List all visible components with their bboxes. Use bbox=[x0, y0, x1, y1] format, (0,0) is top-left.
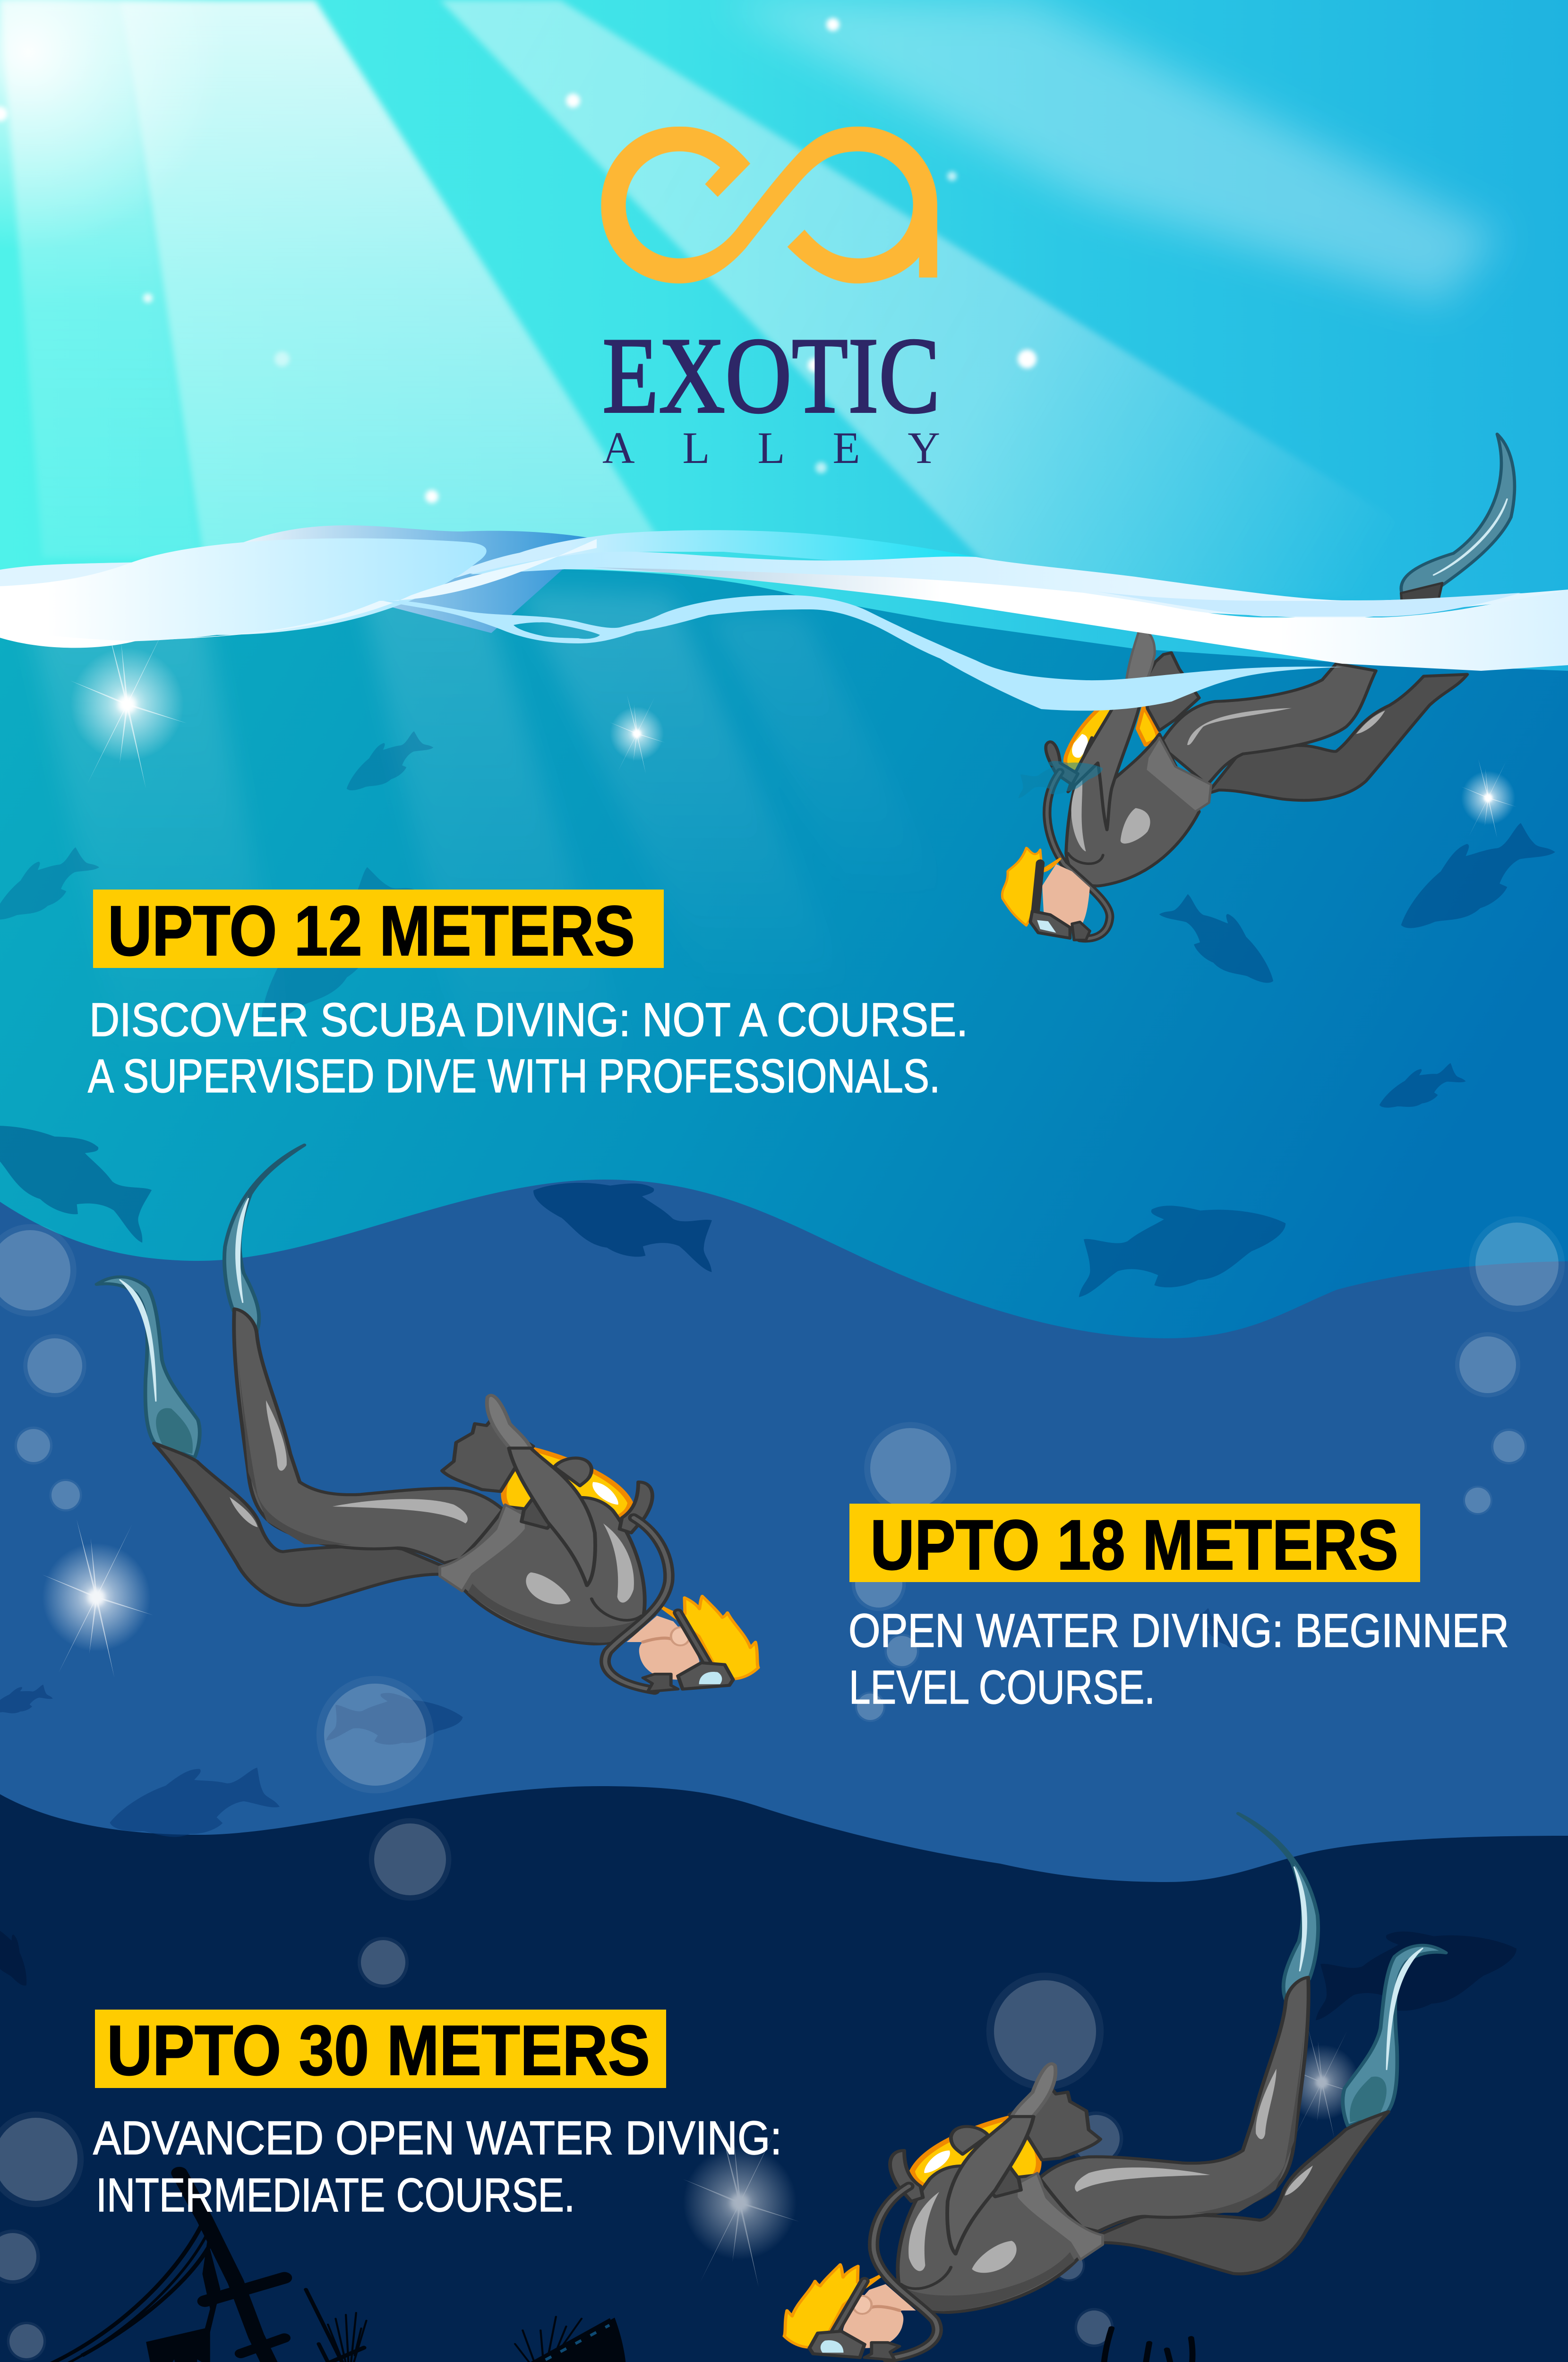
belt bbox=[1146, 737, 1211, 812]
water surface bbox=[0, 525, 1568, 710]
fish silhouettes: middle zone bbox=[0, 1603, 1240, 1874]
kelp and corals: right seabed bbox=[784, 2328, 1568, 2362]
wreck grass bbox=[328, 2313, 582, 2362]
back crest bbox=[203, 525, 597, 633]
description: 18 meters bbox=[848, 1604, 1509, 1714]
front left wave bbox=[0, 560, 203, 626]
under-surface ribbon with loop bbox=[383, 595, 1342, 710]
white foam band bbox=[593, 567, 1568, 671]
label: upto 12 meters: UPTO 12 METERS bbox=[108, 891, 635, 970]
fish silhouettes: upper shallow zone bbox=[0, 719, 433, 1055]
description: 12 meters: A SUPERVISED DIVE WITH PROFESSIONALS. bbox=[88, 1050, 940, 1103]
fin bbox=[1401, 434, 1515, 593]
description: 30 meters bbox=[93, 2112, 782, 2222]
head bbox=[1042, 864, 1090, 933]
pale band across surface bbox=[470, 552, 1568, 620]
deck rail bbox=[394, 2322, 612, 2362]
description: 30 meters: INTERMEDIATE COURSE. bbox=[96, 2169, 575, 2222]
fish silhouettes: deep zone bbox=[0, 1908, 1517, 2362]
label: upto 18 meters: UPTO 18 METERS bbox=[870, 1505, 1398, 1584]
torso bbox=[1066, 734, 1199, 886]
water body: shallow zone bbox=[0, 569, 1568, 1417]
sky background bbox=[0, 0, 1568, 709]
logo icon bbox=[601, 127, 937, 283]
fish silhouette: on band crest bbox=[528, 1175, 719, 1272]
diver at 30 meters bbox=[784, 1814, 1446, 2360]
sun rays bbox=[0, 0, 1517, 595]
logo wordmark: ALLEY: ALLEY bbox=[602, 423, 940, 473]
description: 18 meters: LEVEL COURSE. bbox=[849, 1661, 1155, 1714]
centre crest bbox=[379, 530, 976, 601]
band: 30 meter zone bbox=[0, 1786, 1568, 2362]
diver at 18 meters bbox=[96, 1145, 758, 1692]
gloves and arm bbox=[1143, 653, 1199, 730]
hull bbox=[0, 2318, 627, 2362]
description: 12 meters bbox=[88, 993, 968, 1103]
masts, rigging and hanging weed bbox=[0, 2173, 582, 2362]
bubbles bbox=[0, 1216, 1565, 2362]
regulator and hose bbox=[1046, 742, 1078, 785]
underwater light beams bbox=[28, 581, 945, 1087]
fish silhouettes: shallow zone bbox=[0, 802, 1555, 1297]
front ribbon bbox=[137, 539, 597, 641]
label: upto 30 meters: UPTO 30 METERS bbox=[107, 2011, 650, 2090]
small fish over diver bbox=[1019, 761, 1103, 798]
kelp bbox=[1096, 2328, 1112, 2362]
floating light particles bbox=[0, 18, 1037, 503]
description: 12 meters: DISCOVER SCUBA DIVING: NOT A COURSE. bbox=[89, 993, 968, 1046]
sparkles bbox=[42, 623, 1517, 2287]
pale right strip bbox=[1096, 591, 1521, 616]
band: 18 meter zone bbox=[0, 1180, 1568, 1890]
logo wordmark: EXOTIC: EXOTIC bbox=[602, 315, 940, 436]
description: 30 meters: ADVANCED OPEN WATER DIVING: bbox=[93, 2112, 782, 2165]
diver at 12 meters bbox=[1002, 434, 1515, 940]
shipwreck bbox=[0, 2173, 627, 2362]
rear leg bbox=[1207, 675, 1467, 800]
tank bbox=[1065, 689, 1126, 772]
front leg bbox=[1159, 664, 1376, 785]
